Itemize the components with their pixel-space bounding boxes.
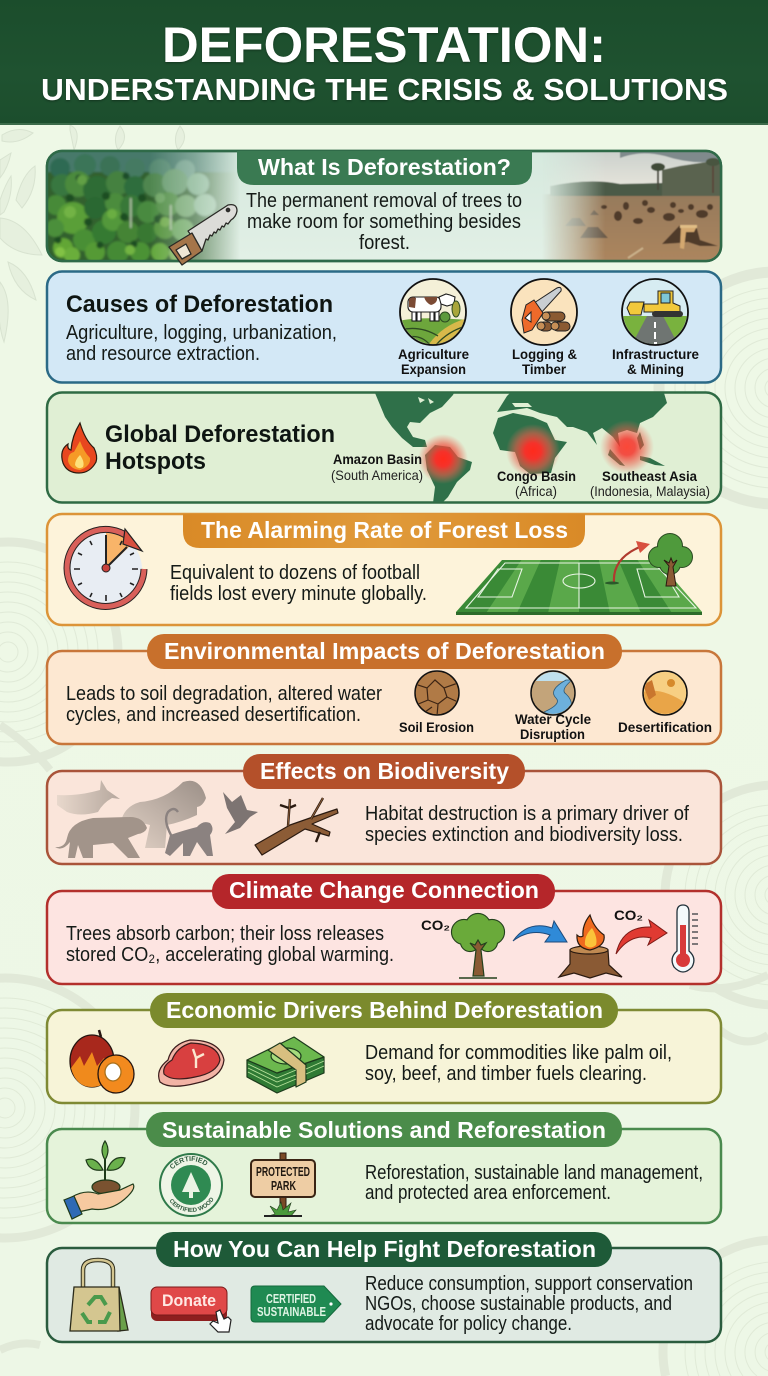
text: how you can help: advocate for policy change. [365,1312,572,1335]
world map [375,393,667,503]
label: logging and timber [512,346,577,377]
label: amazon basin: (South America) [331,467,423,483]
icon: logging [511,279,577,345]
icon: healthy tree [452,914,504,978]
panel: economic drivers [47,993,721,1103]
text: rate: Equivalent to dozens of football [170,561,420,584]
text: economic [365,1041,672,1085]
button: donate: Donate [162,1291,216,1310]
label: congo basin: (Africa) [515,483,557,499]
pill: alarming rate: The Alarming Rate of Forest Loss [201,517,568,543]
title [41,17,728,107]
arrow: red [616,920,667,954]
text: solutions: Reforestation, sustainable land management, [365,1161,703,1184]
label: infrastructure and mining: Infrastructure [612,346,699,362]
text: environmental impacts: cycles, and increased desertification. [66,703,361,726]
label: CO2 absorbed: CO₂ [421,917,450,933]
pill: what is deforestation: What Is Deforestation? [258,154,511,180]
panel: solutions [46,1112,722,1224]
text: environmental impacts: Leads to soil degradation, altered water [66,682,382,705]
pill: biodiversity [243,754,525,789]
text: climate change [66,922,394,966]
badge: certified sustainable [251,1286,341,1322]
icon: palm fruit [70,1030,134,1093]
text: how you can help: NGOs, choose sustainable products, and [365,1292,672,1315]
heading: hotspots: Hotspots [105,448,206,475]
text: solutions: and protected area enforcement. [365,1181,611,1204]
label: logging and timber: Logging & [512,346,577,362]
heading: hotspots: Global Deforestation [105,421,335,448]
text: economic: soy, beef, and timber fuels clearing. [365,1062,647,1085]
text: definition: forest. [359,231,410,254]
label: water cycle disruption: Water Cycle [515,712,591,727]
text: causes: and resource extraction. [66,342,260,365]
icon: soil erosion [415,671,459,716]
text: rate [170,561,427,605]
badge: certified sustainable: CERTIFIED [266,1292,316,1306]
pill: how you can help: How You Can Help Fight Deforestation [173,1236,596,1262]
icon: burning stump [559,915,622,978]
badge: certified sustainable: SUSTAINABLE [257,1305,326,1319]
label: agriculture expansion: Expansion [401,361,466,377]
pill: alarming rate [183,514,585,548]
icon: fading animals [55,780,258,858]
title: DEFORESTATION: [162,17,606,73]
icon: desertification [643,671,690,716]
text: solutions [365,1161,703,1204]
panel: environmental impacts [47,634,721,744]
pill: economic drivers [150,993,618,1028]
text: definition: The permanent removal of trees to [246,189,522,212]
pill: biodiversity: Effects on Biodiversity [260,758,509,784]
pill: solutions: Sustainable Solutions and Reforestation [162,1117,606,1143]
label: amazon basin: Amazon Basin [333,451,422,467]
label: congo basin [497,468,576,499]
pill: economic drivers: Economic Drivers Behind Deforestation [166,997,603,1023]
text: environmental impacts [66,682,382,726]
panel: climate change [47,874,721,984]
pill: how you can help [156,1232,612,1267]
icon: thermometer [672,905,698,972]
text: climate change: Trees absorb carbon; their loss releases [66,922,384,945]
icon: water cycle [530,670,576,716]
label: soil erosion: Soil Erosion [399,720,474,735]
header band [0,0,768,125]
title: UNDERSTANDING THE CRISIS & SOLUTIONS [41,72,728,107]
icon: protected park sign: PROTECTED [256,1165,310,1179]
label: infrastructure and mining: & Mining [627,361,684,377]
clear-cut photo [546,152,720,260]
label: amazon basin [331,451,423,483]
icon: protected park sign [251,1153,315,1217]
panel: how you can help [47,1232,721,1342]
text: biodiversity: Habitat destruction is a primary driver of [365,802,689,825]
text: definition [246,189,522,254]
text: economic: Demand for commodities like palm oil, [365,1041,672,1064]
icon: recycling bag [70,1260,128,1331]
text: how you can help: Reduce consumption, support conservation [365,1272,693,1295]
label: agriculture expansion [398,346,469,377]
pill: what is deforestation [237,151,532,185]
label: CO2 released: CO₂ [614,907,643,923]
label: southeast asia: Southeast Asia [602,468,697,484]
panel: what is deforestation [44,148,725,265]
icon: flame [62,423,97,473]
label: water cycle disruption [515,712,591,742]
button: donate [151,1287,231,1332]
icon: protected park sign: PARK [271,1179,296,1193]
icon: certification seal: CERTIFIED [170,1156,208,1169]
icon: pointer hand [210,1310,231,1332]
text: rate: fields lost every minute globally. [170,582,427,605]
panel: biodiversity [47,754,721,864]
pill: climate change: Climate Change Connection [229,877,539,903]
watermark: leaves [0,125,185,342]
panel: alarming rate [47,514,721,625]
label: congo basin: Congo Basin [497,468,576,484]
text: biodiversity [365,802,689,846]
icon: beef steak [159,1040,224,1086]
forest photo [48,152,237,260]
icon: certification seal [159,1153,223,1217]
heading: hotspots [105,421,335,475]
text: biodiversity: species extinction and biodiversity loss. [365,823,683,846]
label: southeast asia [590,468,710,499]
icon: dead branch [255,798,338,855]
icon: certification seal: CERTIFIED WOOD [170,1198,214,1212]
pill: climate change [212,874,555,909]
icon: agriculture [398,279,468,350]
text: how you can help [365,1272,693,1335]
label: southeast asia: (Indonesia, Malaysia) [590,483,710,499]
pill: environmental impacts [147,634,622,669]
icon: hand with seedling [64,1141,134,1219]
label: desertification: Desertification [618,720,712,735]
panel: causes [47,272,721,382]
arrow: blue [513,921,567,942]
panel: hotspots [47,392,721,503]
icon: hand saw [169,205,237,265]
label: logging and timber: Timber [522,361,567,377]
text: definition: make room for something besides [247,210,521,233]
pill: environmental impacts: Environmental Impacts of Deforestation [164,638,605,664]
text: causes: Agriculture, logging, urbanization, [66,321,337,344]
icon: tree [649,534,692,586]
icon: infrastructure [620,279,690,348]
icon: clock [67,529,144,606]
icon: football field [456,541,702,615]
text: climate change: stored CO₂, accelerating global warming. [66,943,394,966]
heading: causes: Causes of Deforestation [66,291,333,318]
text: causes [66,321,337,365]
label: water cycle disruption: Disruption [520,727,585,742]
label: infrastructure and mining [612,346,699,377]
pill: solutions [146,1112,622,1147]
icon: money stack [247,1037,324,1093]
label: agriculture expansion: Agriculture [398,346,469,362]
